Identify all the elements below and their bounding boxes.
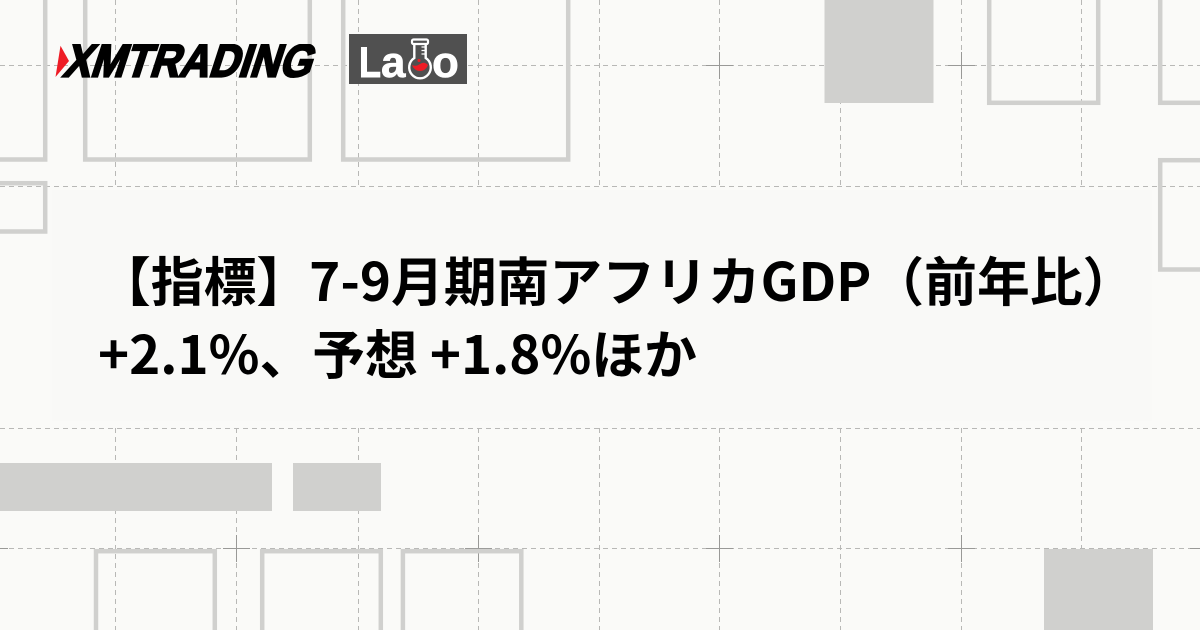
- title: 【指標】7-9月期南アフリカGDP（前年比）: [98, 241, 1135, 317]
- title: +2.1%、予想 +1.8%ほか: [98, 314, 697, 390]
- title: [98, 241, 1135, 390]
- icon: red triangle: [56, 46, 69, 77]
- icon: flask: [409, 40, 431, 78]
- Lab logo: [349, 34, 467, 84]
- XMTRADING logo: [56, 44, 323, 80]
